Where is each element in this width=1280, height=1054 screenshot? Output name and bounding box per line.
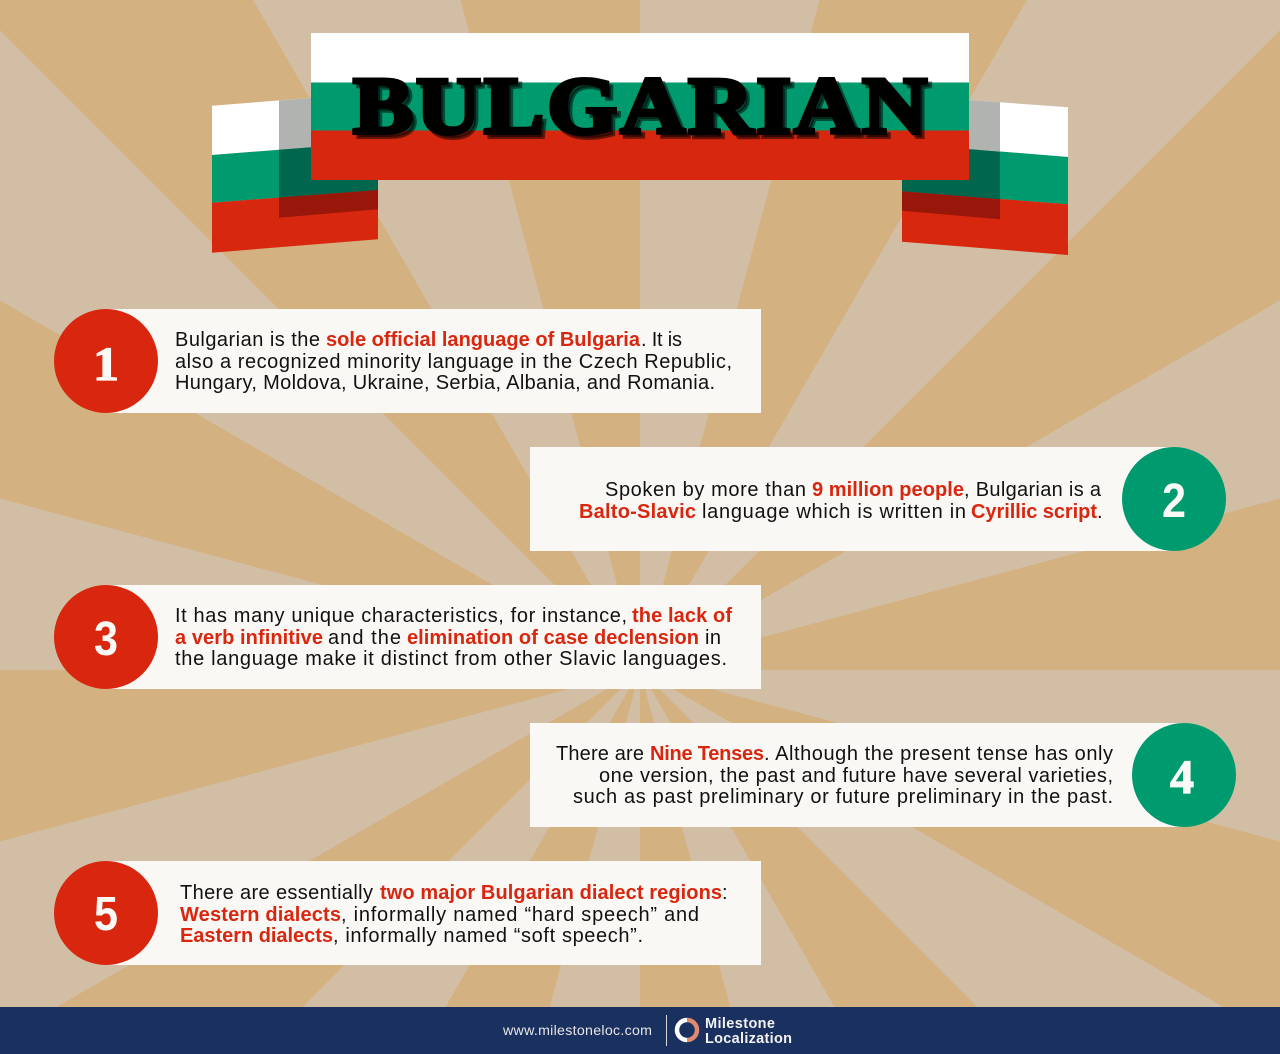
fact 2: 9 million people: [812, 479, 964, 501]
fact 5: Eastern dialects: [180, 925, 333, 947]
fact 5: 5: [94, 888, 118, 941]
fact 1: [54, 309, 761, 413]
fact 5: There are essentially: [180, 882, 373, 904]
fact 3: [54, 585, 761, 689]
fact 1: Hungary, Moldova, Ukraine, Serbia, Albania, and Romania.: [175, 372, 715, 394]
fact 3: a verb infinitive: [175, 627, 323, 649]
icon: Milestone logo ring: [677, 1020, 697, 1040]
fact 3: elimination of case declension: [407, 627, 699, 649]
fact 4: such as past preliminary or future preliminary in the past.: [573, 786, 1113, 808]
fact 4: one version, the past and future have several varieties,: [599, 765, 1113, 787]
title: BULGARIAN: [353, 60, 927, 151]
fact 2: Cyrillic script: [971, 501, 1097, 523]
fact 1: sole official language of Bulgaria: [326, 329, 641, 351]
left ribbon tail: [212, 93, 378, 253]
fact 3: It has many unique characteristics, for instance,: [175, 605, 627, 627]
fact 5: two major Bulgarian dialect regions: [380, 882, 722, 904]
fact 4: [530, 723, 1236, 827]
fact 2: 2: [1162, 475, 1186, 528]
fact 2: Balto-Slavic: [579, 501, 696, 523]
brand name: [705, 1016, 792, 1047]
fact 2: Spoken by more than: [605, 479, 806, 501]
fact 5: :: [722, 882, 728, 904]
fact 5: [54, 861, 761, 965]
main banner in flag colours: [311, 33, 969, 180]
right ribbon tail: [902, 95, 1068, 255]
fact 5: Western dialects: [180, 904, 341, 926]
website address: www.milestoneloc.com: [502, 1023, 652, 1039]
brand name: Localization: [705, 1031, 792, 1047]
fact 1: also a recognized minority language in the Czech Republic,: [175, 351, 732, 373]
fact 3: 3: [94, 613, 118, 666]
fact 3: in: [705, 627, 721, 649]
fact 3: the language make it distinct from other Slavic languages.: [175, 648, 727, 670]
fact 4: 4: [1170, 751, 1194, 804]
title: BULGARIAN: [357, 64, 931, 155]
fact 4: There are: [556, 743, 644, 765]
fact 2: language which is written in: [702, 501, 966, 523]
fact 2: [530, 447, 1226, 551]
fact 3: and the: [328, 627, 401, 649]
fact 5: , informally named “hard speech” and: [341, 904, 699, 926]
brand name: Milestone: [705, 1016, 775, 1032]
fact 1: . It is: [641, 329, 682, 351]
fact 4: . Although the present tense has only: [764, 743, 1113, 765]
fact 5: , informally named “soft speech”.: [333, 925, 643, 947]
fact 2: , Bulgarian is a: [964, 479, 1102, 501]
fact 3: the lack of: [632, 605, 732, 627]
footer bar: [0, 1007, 1280, 1054]
fact 4: Nine Tenses: [650, 743, 764, 765]
fact 2: .: [1097, 501, 1103, 523]
fact 1: 1: [93, 338, 119, 391]
fact 1: Bulgarian is the: [175, 329, 320, 351]
